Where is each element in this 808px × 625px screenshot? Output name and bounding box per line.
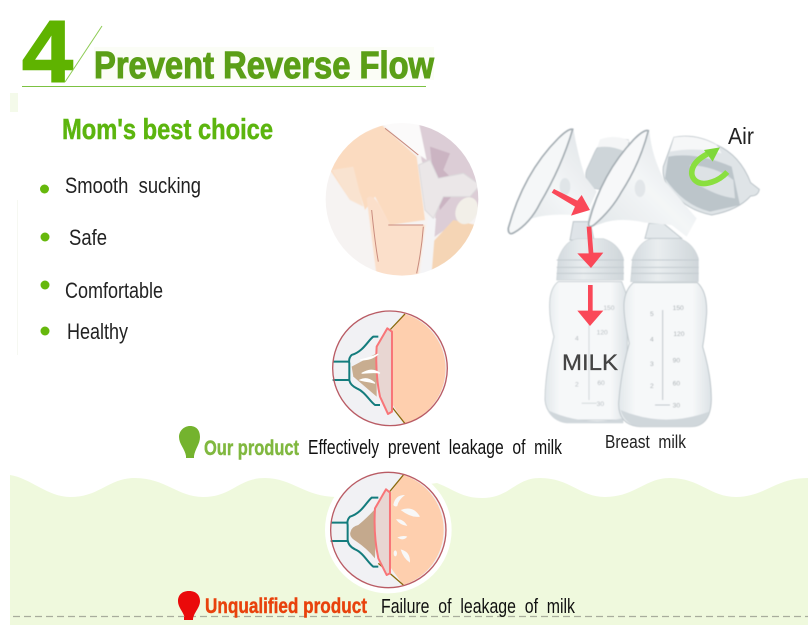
icon: red lightbulb <box>178 591 200 620</box>
front bottle: 120 <box>673 331 685 338</box>
front bottle: 5 <box>650 311 654 318</box>
back bottle <box>545 222 627 423</box>
back bottle: 60 <box>597 380 605 387</box>
list: benefits: Smooth sucking <box>65 173 201 198</box>
list: benefits <box>40 173 201 344</box>
list: benefits: Healthy <box>67 319 128 344</box>
front bottle: 60 <box>673 381 680 388</box>
front flange <box>588 131 697 237</box>
back flange <box>507 128 597 234</box>
diagram: unqualified product <box>325 467 452 593</box>
back bottle: 4 <box>575 336 579 343</box>
diagram: our product <box>333 311 447 426</box>
back bottle: 2 <box>575 382 579 389</box>
front bottle: 150 <box>673 305 684 312</box>
pump illustration <box>507 128 759 427</box>
label: our product: Our product <box>204 437 299 460</box>
icon: green lightbulb <box>179 426 200 458</box>
front bottle: 30 <box>673 402 680 409</box>
label: breast milk: Breast milk <box>605 432 687 452</box>
arrows: red milk flow <box>552 189 603 326</box>
front bottle: 3 <box>650 361 654 368</box>
front bottle: 90 <box>673 357 680 364</box>
front pump motor head <box>663 136 759 215</box>
photo: mother using breast pump <box>323 120 483 280</box>
label: milk: MILK <box>562 350 618 375</box>
back bottle: 150 <box>603 305 615 312</box>
label: our product: Effectively prevent leakage of milk <box>308 437 563 459</box>
number 4: 4 <box>22 2 73 101</box>
heading: mom's best choice: Mom's best choice <box>62 114 273 146</box>
back pump head <box>586 137 632 190</box>
list: benefits: Comfortable <box>65 278 163 303</box>
icon: green air arrow <box>692 147 727 183</box>
front bottle: 2 <box>650 383 654 390</box>
list: benefits: Safe <box>69 225 107 250</box>
label: our product <box>179 426 563 460</box>
front bottle <box>619 223 711 427</box>
heading: section title <box>22 2 434 101</box>
front bottle: 4 <box>650 337 654 344</box>
label: unqualified product: Failure of leakage of milk <box>381 596 576 618</box>
back bottle: 30 <box>597 401 604 408</box>
label: air: Air <box>728 123 754 149</box>
label: unqualified product <box>178 591 576 620</box>
back bottle: 120 <box>597 329 608 336</box>
label: unqualified product: Unqualified product <box>205 595 367 618</box>
heading: section title: Prevent Reverse Flow <box>94 45 434 87</box>
